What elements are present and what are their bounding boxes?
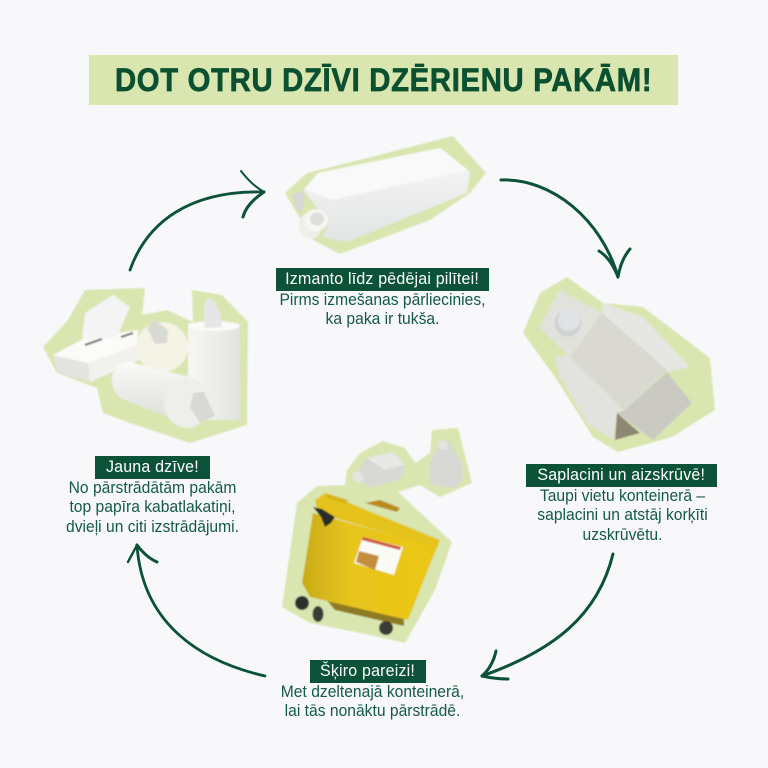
step 1 text: Pirms izmešanas pārliecinies, [280,290,485,309]
step 2 text: saplacini un atstāj korķīti [537,505,708,524]
illustration: flattened carton [523,277,715,452]
arrow: to step 2 [501,180,630,277]
step 1 label: Izmanto līdz pēdējai pilītei! [286,269,479,288]
step 2 text: uzskrūvētu. [583,525,662,544]
step 4 text: dvieļi un citi izstrādājumi. [66,517,239,536]
step 2 label: Saplacini un aizskrūvē! [538,465,705,484]
step 3 label [310,660,426,683]
step 1 text [280,290,485,328]
step 4 label: Jauna dzīve! [106,457,199,476]
step 3 text: lai tās nonāktu pārstrādē. [285,701,460,720]
step 1 text: ka paka ir tukša. [326,309,439,328]
title [89,55,678,105]
step 4 text: No pārstrādātām pakām [69,478,236,497]
illustration: empty carton [285,136,486,254]
step 2 text: Taupi vietu konteinerā – [540,486,705,505]
step 4 text [66,478,239,536]
illustration: yellow container with cartons [282,428,472,643]
step 4 text: top papīra kabatlakatiņi, [69,497,236,516]
illustration: paper products [43,288,248,443]
step 3 label: Šķiro pareizi! [321,661,415,680]
title: DOT OTRU DZĪVI DZĒRIENU PAKĀM! [115,62,652,98]
step 3 text [281,682,464,720]
step 3 text: Met dzeltenajā konteinerā, [281,682,464,701]
arrow: to step 3 [482,554,613,679]
arrow: to step 4 [128,545,265,676]
arrow: to step 1 [130,171,264,270]
step 4 label [95,456,210,479]
step 2 text [537,486,708,544]
